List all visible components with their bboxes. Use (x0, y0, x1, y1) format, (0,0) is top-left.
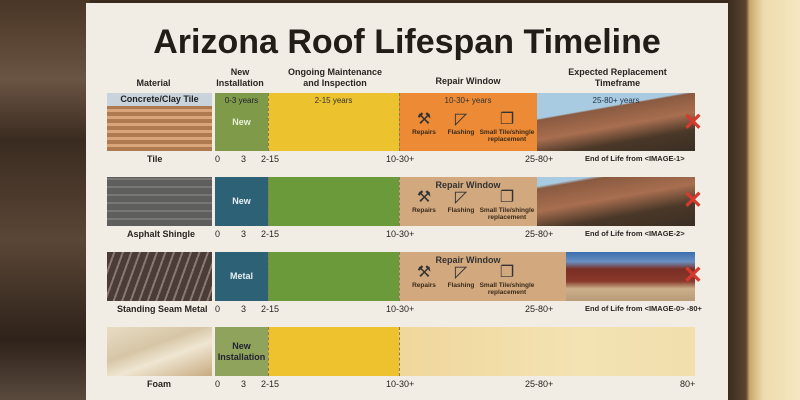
maintenance phase: 2-15 years (315, 96, 352, 105)
new phase (215, 327, 268, 376)
new phase: Installation (218, 352, 265, 362)
repair window: replacement (488, 214, 526, 221)
replacement photo: ✕ (683, 262, 703, 289)
new phase: Metal (230, 271, 253, 281)
material image: shingle (107, 177, 212, 226)
row 3: metal: 0 (215, 304, 220, 314)
repair window: replacement (488, 136, 526, 143)
repair window: ❐ (500, 189, 514, 206)
row 3: metal: 25-80+ (525, 304, 553, 314)
new phase: New (232, 117, 251, 127)
replacement photo: ✕ (683, 109, 703, 136)
row 3: metal: 2-15 (261, 304, 279, 314)
maintenance phase (268, 93, 399, 151)
row 2: asphalt: End of Life from <IMAGE-2> (585, 229, 685, 238)
axis labels: Asphalt Shingle (127, 229, 195, 239)
repair window (399, 93, 537, 151)
column headers: Ongoing Maintenance (288, 67, 382, 77)
material image: foam (107, 327, 212, 376)
row 2: asphalt: 10-30+ (386, 229, 414, 239)
row 3: metal: 10-30+ (386, 304, 414, 314)
background right wall (728, 0, 800, 400)
row 2: asphalt: 0 (215, 229, 220, 239)
replacement photo: ✕ (683, 187, 703, 214)
repair window: ⚒ (417, 111, 431, 128)
title: Arizona Roof Lifespan Timeline (153, 23, 661, 61)
replacement photo (537, 93, 695, 151)
axis labels: Foam (147, 379, 171, 389)
row 1: tile: 25-80+ (525, 154, 553, 164)
repair window: ◸ (455, 111, 467, 128)
new phase (215, 252, 268, 301)
repair window (399, 177, 537, 226)
repair window (399, 252, 566, 301)
row 4: foam: 10-30+ (386, 379, 414, 389)
row 4: foam: 80+ (680, 379, 695, 389)
repair window: Flashing (448, 282, 474, 289)
row 4: foam (107, 327, 695, 389)
replacement photo (566, 252, 695, 301)
maintenance phase (268, 252, 399, 301)
column headers: and Inspection (303, 78, 367, 88)
repair window: replacement (488, 289, 526, 296)
repair window: 10-30+ years (445, 96, 491, 105)
new phase (215, 177, 268, 226)
maintenance phase (268, 327, 399, 376)
new phase: New (232, 196, 251, 206)
repair window: ❐ (500, 264, 514, 281)
column headers: New (231, 67, 249, 77)
row 4: foam: 25-80+ (525, 379, 553, 389)
repair window: Repair Window (436, 255, 500, 265)
repair window: Repairs (412, 129, 436, 136)
repair window: Flashing (448, 207, 474, 214)
row 2: asphalt (107, 177, 703, 239)
new phase: 0-3 years (225, 96, 258, 105)
row 3: metal (107, 252, 703, 314)
row 3: metal: End of Life from <IMAGE-0> -80+ (585, 304, 702, 313)
material image: tile: Concrete/Clay Tile (120, 94, 199, 104)
new phase: New (232, 341, 251, 351)
material image: metal (107, 252, 212, 301)
column headers: Installation (216, 78, 264, 88)
repair window: Small Tile/shingle (480, 129, 534, 136)
replacement photo: 25-80+ years (593, 96, 639, 105)
material image: tile (107, 93, 212, 151)
repair window: Small Tile/shingle (480, 282, 534, 289)
poster (86, 3, 728, 400)
repair window: ⚒ (417, 189, 431, 206)
column headers: Expected Replacement (568, 67, 667, 77)
row 1: tile: 2-15 (261, 154, 279, 164)
column headers: Timeframe (595, 78, 640, 88)
axis labels: Tile (147, 154, 162, 164)
row 1: tile: 10-30+ (386, 154, 414, 164)
column headers: Material (136, 78, 170, 88)
row 1: tile (107, 93, 703, 164)
row 2: asphalt: 2-15 (261, 229, 279, 239)
background left shelf (0, 0, 90, 400)
row 1: tile: 0 (215, 154, 220, 164)
column headers: Repair Window (436, 76, 500, 86)
repair window: ◸ (455, 264, 467, 281)
repair window: ◸ (455, 189, 467, 206)
repair window: Small Tile/shingle (480, 207, 534, 214)
repair window: Repairs (412, 282, 436, 289)
column headers (136, 67, 667, 88)
repair window: ❐ (500, 111, 514, 128)
row 3: metal: 3 (241, 304, 246, 314)
row 1: tile: End of Life from <IMAGE-1> (585, 154, 685, 163)
repair window: ⚒ (417, 264, 431, 281)
repair window: Repair Window (436, 180, 500, 190)
row 2: asphalt: 3 (241, 229, 246, 239)
repair window: Flashing (448, 129, 474, 136)
row 4: foam: 3 (241, 379, 246, 389)
replacement photo (537, 177, 695, 226)
axis labels: Standing Seam Metal (117, 304, 208, 314)
row 1: tile: 3 (241, 154, 246, 164)
remaining band (399, 327, 695, 376)
maintenance phase (268, 177, 399, 226)
row 4: foam: 2-15 (261, 379, 279, 389)
row 4: foam: 0 (215, 379, 220, 389)
row 2: asphalt: 25-80+ (525, 229, 553, 239)
new phase (215, 93, 268, 151)
repair window: Repairs (412, 207, 436, 214)
